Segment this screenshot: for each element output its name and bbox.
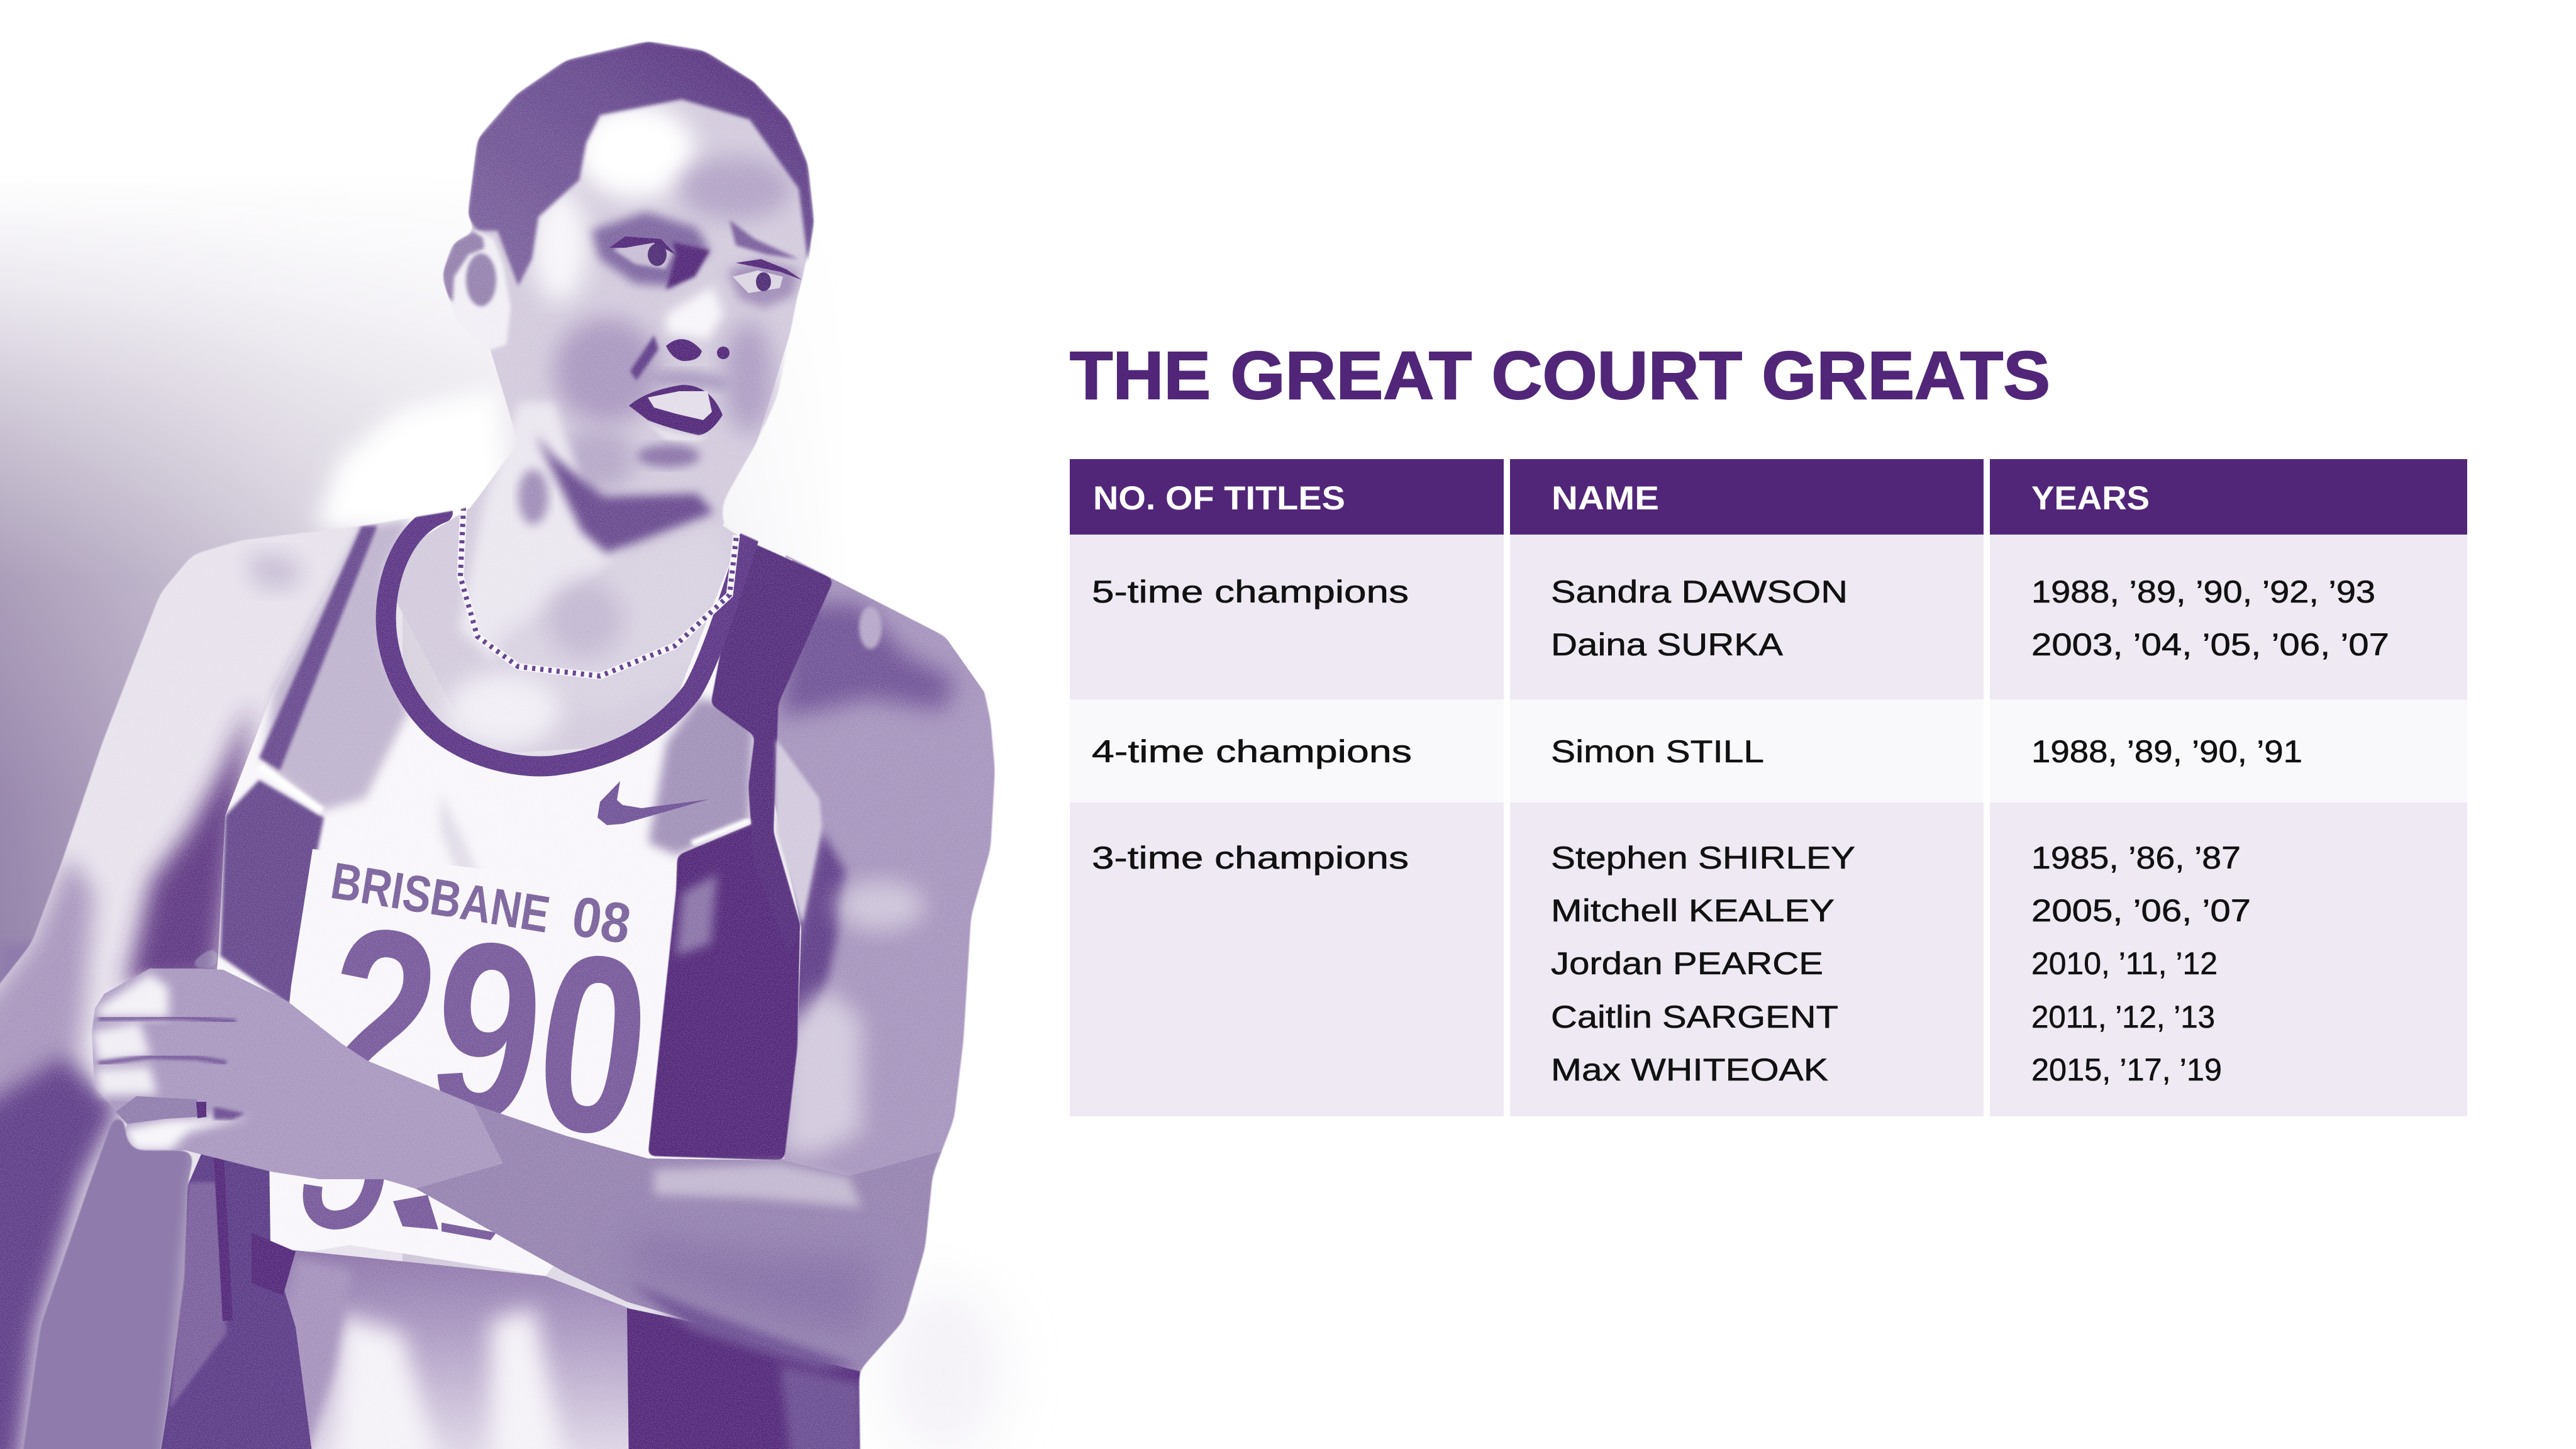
header row: NAME <box>1552 480 1659 517</box>
row: 3-time champions: Stephen SHIRLEY <box>1551 840 1855 875</box>
row: 3-time champions: Jordan PEARCE <box>1551 946 1823 981</box>
row: 5-time champions: 5-time champions <box>1092 574 1409 609</box>
singlet <box>201 513 834 1258</box>
row: 5-time champions: Sandra DAWSON <box>1551 574 1848 609</box>
row: 5-time champions: 2003, ’04, ’05, ’06, ’07 <box>2031 627 2389 662</box>
armhole skin highlight <box>776 739 822 923</box>
row: 3-time champions: Max WHITEOAK <box>1551 1052 1828 1087</box>
bib text: 08: 08 <box>568 885 635 956</box>
left strap <box>264 519 411 811</box>
row: 3-time champions <box>1070 802 2467 1116</box>
photo background gradient <box>0 0 1006 1449</box>
photo: runner in duotone <box>0 0 1006 1449</box>
lower left arm <box>0 1057 119 1449</box>
row: 3-time champions: 3-time champions <box>1092 840 1409 875</box>
left dark panel <box>220 780 324 1006</box>
forearm <box>319 1044 943 1371</box>
header row: NO. OF TITLES <box>1093 480 1345 517</box>
right arm and shoulder <box>742 553 1006 1449</box>
table <box>1070 459 2467 1116</box>
left arm inner shadow <box>126 704 252 987</box>
necklace <box>460 508 736 676</box>
row: 5-time champions: Daina SURKA <box>1551 627 1784 662</box>
bib sponsor mark <box>313 1177 496 1240</box>
hand <box>92 969 503 1189</box>
gap between fingers <box>116 1096 208 1124</box>
row: 3-time champions: 2005, ’06, ’07 <box>2031 893 2251 928</box>
row: 3-time champions: 2011, ’12, ’13 <box>2031 999 2215 1035</box>
right folds <box>648 698 755 855</box>
row: 3-time champions: 1985, ’86, ’87 <box>2031 840 2241 875</box>
eyes <box>592 212 802 308</box>
bib text: BRISBANE 08: BRISBANE <box>327 852 553 944</box>
photo grain <box>0 25 1006 1449</box>
row: 5-time champions <box>1070 535 2467 699</box>
header row: YEARS <box>2031 480 2150 517</box>
row: 4-time champions: 4-time champions <box>1092 734 1412 769</box>
bib number: 290: 290 <box>312 872 663 1190</box>
right dark panel <box>648 818 800 1160</box>
left arm outer tone <box>0 852 107 1112</box>
row: 3-time champions: Mitchell KEALEY <box>1551 893 1835 928</box>
row: 3-time champions: 2010, ’11, ’12 <box>2031 946 2218 981</box>
head and neck skin <box>377 41 814 755</box>
row: 4-time champions: Simon STILL <box>1551 734 1764 769</box>
ear <box>440 231 511 351</box>
neckline band <box>386 513 748 767</box>
row: 3-time champions: 2015, ’17, ’19 <box>2031 1052 2222 1087</box>
row: 4-time champions <box>1070 699 2467 802</box>
swoosh logo <box>597 781 709 825</box>
nose and mouth <box>629 286 733 467</box>
right strap and armhole band <box>711 538 834 956</box>
row: 3-time champions: Caitlin SARGENT <box>1551 999 1838 1035</box>
header row <box>1070 459 2467 535</box>
row: 4-time champions: 1988, ’89, ’90, ’91 <box>2031 734 2302 769</box>
left arm <box>0 503 402 1449</box>
race bib <box>268 849 674 1276</box>
row: 5-time champions: 1988, ’89, ’90, ’92, ’93 <box>2031 574 2375 609</box>
jaw shadow <box>535 434 714 553</box>
lower singlet <box>157 1151 868 1449</box>
figure <box>0 25 1006 1449</box>
hair <box>467 41 814 286</box>
title: THE GREAT COURT GREATS <box>1070 337 2050 413</box>
